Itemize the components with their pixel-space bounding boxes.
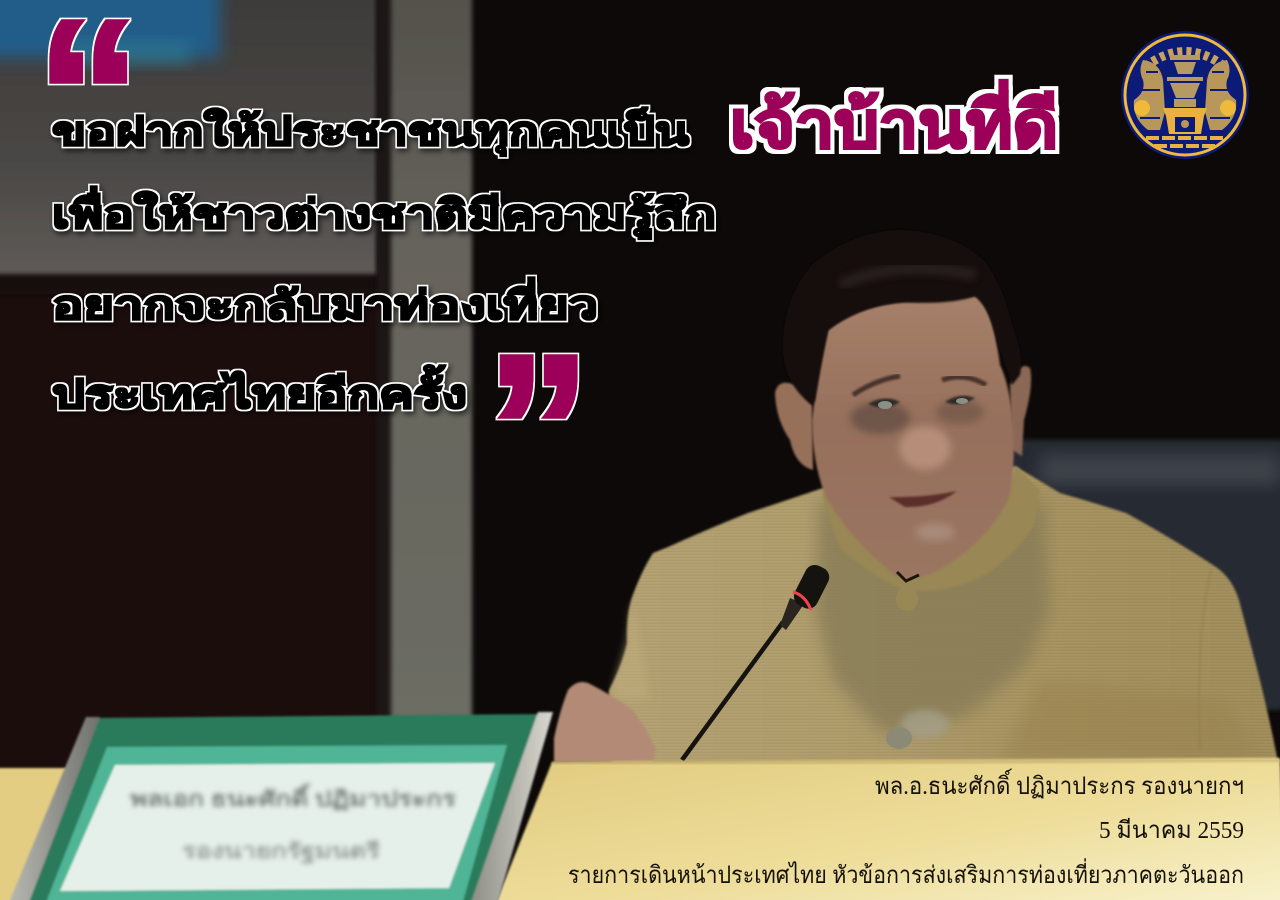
closing quotation mark: ” bbox=[486, 311, 591, 548]
microphone bbox=[682, 561, 833, 760]
offering bowl bbox=[1167, 55, 1203, 107]
name card bbox=[60, 763, 495, 891]
hair bbox=[783, 230, 1021, 405]
collar bbox=[822, 466, 1040, 591]
highlighted phrase: เจ้าบ้านที่ดี bbox=[730, 80, 1058, 161]
chair bbox=[1000, 440, 1280, 710]
speaker name: พล.อ.ธนะศักดิ์ ปฏิมาประกร รองนายกฯ bbox=[875, 768, 1244, 800]
lower button bbox=[886, 710, 949, 749]
neck button bbox=[896, 587, 918, 611]
right ear bbox=[1010, 366, 1031, 456]
caption bbox=[568, 768, 1244, 889]
table bbox=[0, 758, 1280, 900]
blurred position text: รองนายกรัฐมนตรี bbox=[182, 839, 381, 865]
government seal bbox=[1121, 31, 1249, 159]
base steps bbox=[1146, 138, 1224, 146]
collar opening bbox=[897, 572, 919, 581]
quote line 1: ขอฝากให้ประชาชนทุกคนเป็น bbox=[52, 106, 689, 157]
mouth bbox=[889, 491, 957, 541]
face bbox=[812, 296, 1014, 578]
eye bags bbox=[850, 400, 984, 434]
right lion bbox=[1205, 60, 1236, 130]
nose bbox=[899, 426, 951, 470]
name plate bbox=[8, 712, 553, 900]
quote line 2: เพื่อให้ชาวต่างชาติมีความรู้สึก bbox=[52, 186, 716, 239]
left ear bbox=[775, 383, 813, 470]
flame crown bbox=[1145, 52, 1225, 67]
quote line 3: อยากจะกลับมาท่องเที่ยว bbox=[52, 277, 598, 328]
pedestal bbox=[1163, 108, 1207, 134]
quote line 4: ประเทศไทยอีกครั้ง bbox=[52, 365, 467, 417]
blurred name text: พลเอก ธนะศักดิ์ ปฏิมาประกร bbox=[130, 783, 457, 811]
hand bbox=[554, 682, 656, 762]
eyebrows bbox=[853, 376, 986, 395]
person bbox=[554, 230, 1278, 762]
jacket bbox=[608, 466, 1278, 762]
date: 5 มีนาคม 2559 bbox=[1099, 817, 1244, 844]
quote text bbox=[52, 106, 716, 417]
left lion bbox=[1134, 60, 1165, 130]
eyes bbox=[868, 396, 975, 409]
